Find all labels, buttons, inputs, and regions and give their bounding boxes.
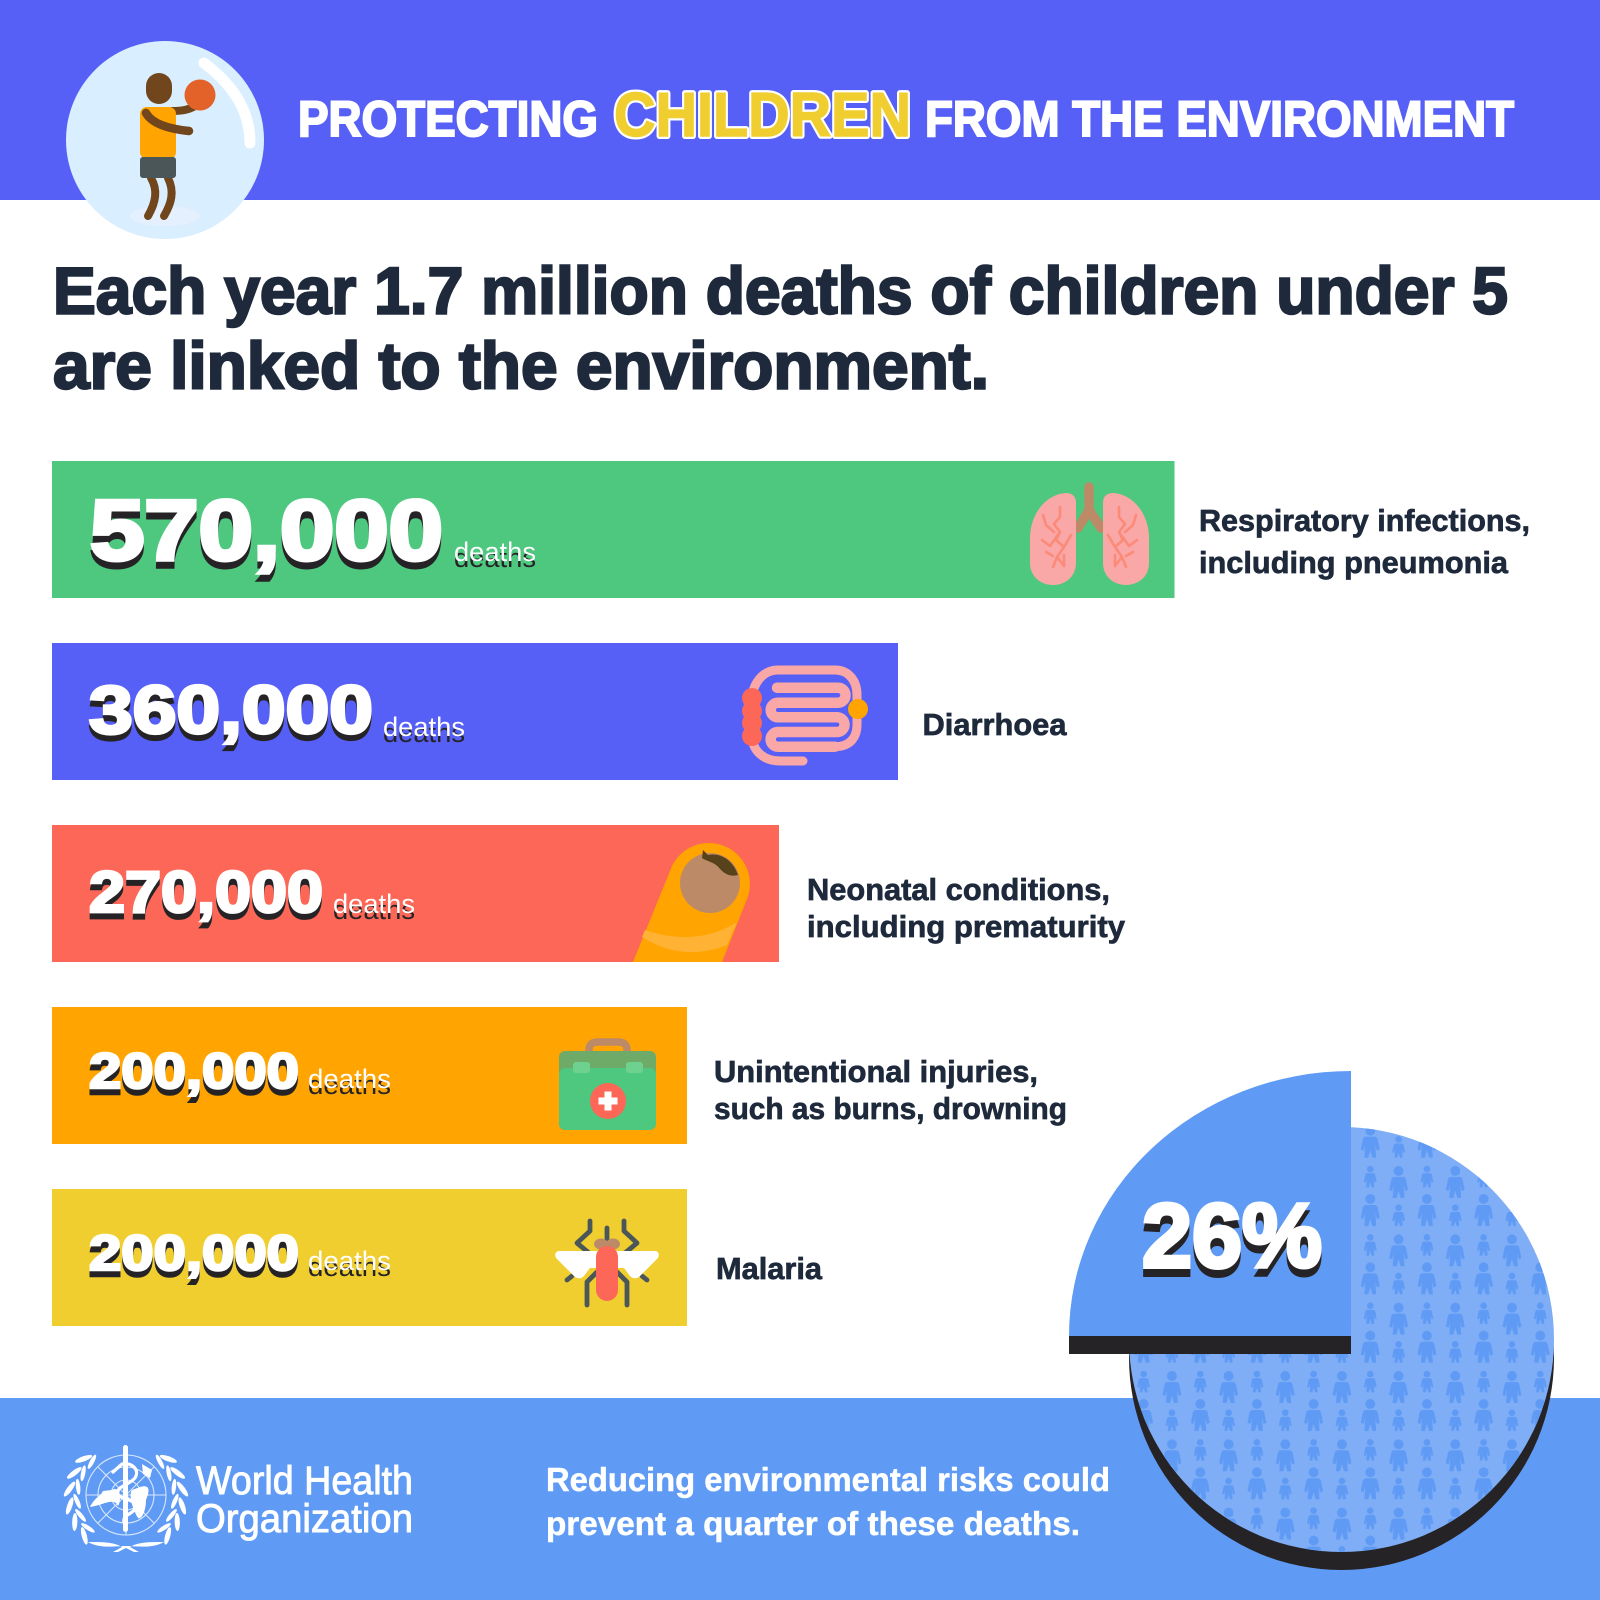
number: 200,000 deaths — [89, 1043, 391, 1105]
footer message: Reducing environmental risks could — [546, 1461, 1110, 1498]
icon: mosquito — [555, 1221, 659, 1305]
bar: neonatal conditions — [52, 825, 1126, 962]
number: 270,000 deaths: 270,000 — [89, 866, 323, 931]
number: 200,000 deaths — [89, 1225, 391, 1287]
number: 200,000 deaths: 200,000 — [89, 1225, 299, 1281]
number: 570,000 deaths: 570,000 — [90, 490, 443, 586]
number: 270,000 deaths: deaths — [333, 889, 415, 919]
pie body with people pattern — [1129, 1127, 1554, 1552]
icon: lungs — [1030, 487, 1149, 585]
label: respiratory: including pneumonia — [1199, 545, 1509, 580]
number: 270,000 deaths: 270,000 — [89, 860, 323, 925]
number: 570,000 deaths: 570,000 — [90, 484, 443, 578]
bar: diarrhoea — [52, 643, 1067, 780]
number: 200,000 deaths: 200,000 — [89, 1049, 299, 1105]
logo: World Health Organization wordmark — [196, 1459, 413, 1541]
logo: World Health Organization wordmark: World Health — [196, 1459, 413, 1503]
label: injuries: such as burns, drowning — [714, 1091, 1067, 1126]
pie chart: 26% — [1069, 1071, 1554, 1570]
title: FROM THE ENVIRONMENT — [925, 91, 1514, 147]
label: malaria: Malaria — [716, 1251, 823, 1286]
footer band — [0, 1398, 1600, 1600]
title: CHILDREN — [614, 81, 911, 150]
pulled-out wedge — [1069, 1071, 1351, 1336]
footer message: prevent a quarter of these deaths. — [546, 1505, 1080, 1542]
number: 200,000 deaths: deaths — [308, 1246, 391, 1276]
label: diarrhoea: Diarrhoea — [922, 707, 1067, 742]
label: injuries — [714, 1054, 1067, 1126]
bar: respiratory infections — [52, 461, 1530, 598]
number: 200,000 deaths: deaths — [308, 1252, 391, 1282]
label: injuries: Unintentional injuries, — [714, 1054, 1038, 1089]
main heading — [53, 254, 1508, 402]
number: 570,000 deaths — [90, 484, 536, 586]
number: 270,000 deaths: deaths — [333, 895, 415, 925]
number: 200,000 deaths: deaths — [308, 1070, 391, 1100]
label: respiratory: Respiratory infections, — [1199, 503, 1530, 538]
label: neonatal — [807, 872, 1126, 944]
icon: child in protective bubble — [66, 41, 264, 239]
number: 200,000 deaths: 200,000 — [89, 1231, 299, 1287]
number: 200,000 deaths: deaths — [308, 1064, 391, 1094]
number: 360,000 deaths — [89, 672, 465, 754]
icon: swaddled baby — [633, 843, 750, 962]
number: 200,000 deaths: 200,000 — [89, 1043, 299, 1099]
title: CHILDREN — [614, 81, 911, 150]
title — [298, 81, 1514, 150]
icon: first aid kit — [559, 1042, 656, 1130]
icon: intestine — [742, 670, 868, 761]
number: 570,000 deaths: deaths — [454, 537, 536, 567]
label: neonatal: Neonatal conditions, — [807, 872, 1110, 907]
logo: World Health Organization wordmark: Organization — [196, 1497, 413, 1541]
number: 360,000 deaths: 360,000 — [89, 672, 373, 748]
bar: malaria — [52, 1189, 823, 1326]
number: 360,000 deaths: deaths — [383, 712, 465, 742]
wedge shadow — [1069, 1336, 1351, 1354]
number: 360,000 deaths: deaths — [383, 718, 465, 748]
percentage: 26% — [1142, 1194, 1322, 1295]
main heading: are linked to the environment. — [53, 328, 989, 402]
main heading: Each year 1.7 million deaths of children under 5 — [53, 254, 1508, 328]
pie shadow — [1129, 1145, 1554, 1570]
label: respiratory — [1199, 503, 1530, 580]
number: 570,000 deaths: deaths — [454, 543, 536, 573]
logo: WHO emblem — [62, 1445, 190, 1552]
footer message — [546, 1461, 1110, 1542]
number: 360,000 deaths: 360,000 — [89, 678, 373, 754]
title: PROTECTING — [298, 91, 598, 147]
label: neonatal: including prematurity — [807, 909, 1126, 944]
number: 270,000 deaths — [89, 860, 415, 931]
bar: unintentional injuries — [52, 1007, 1067, 1144]
percentage: 26% — [1142, 1186, 1322, 1287]
header band — [0, 0, 1600, 200]
